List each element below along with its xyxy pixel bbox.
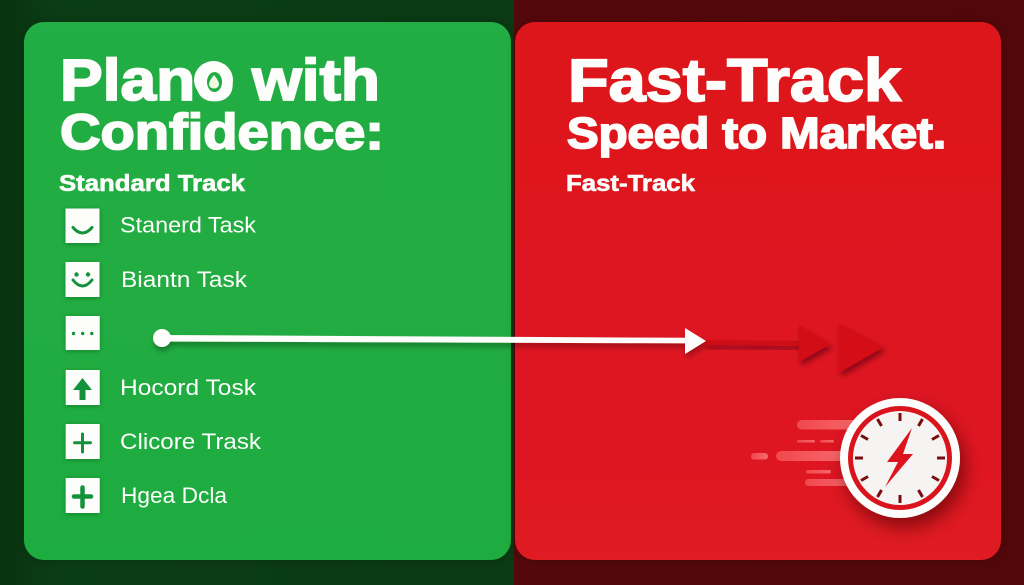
panel: standard track [24, 22, 511, 560]
panel: fast-track [515, 22, 1001, 560]
task row 4: Hocord Tosk [120, 375, 257, 400]
title: fast-track speed to market [567, 47, 946, 158]
task row 2: Biantn Task [121, 267, 248, 292]
subheading: fast-track: Fast-Track [566, 170, 695, 196]
task row 6: Hgea Dcla [121, 483, 228, 508]
background: dark red half [514, 0, 1024, 585]
task row 3: dots icon [66, 316, 100, 350]
task row 5 [66, 424, 262, 459]
task row 1: Stanerd Task [120, 212, 257, 238]
subheading: standard track: Standard Track [59, 170, 245, 196]
title: fast-track speed to market: Speed to Market. [567, 109, 946, 158]
red continuation arrow with double chevrons [704, 323, 884, 373]
task row 6 [66, 478, 228, 513]
task row 2 [66, 262, 248, 297]
title: plan with confidence: Plano with [60, 48, 380, 113]
task row 1 [66, 208, 257, 243]
stopwatch icon [840, 398, 960, 518]
task row 5: Clicore Trask [120, 429, 262, 454]
task row 4 [66, 370, 257, 405]
title: plan with confidence [60, 48, 384, 160]
arrow: standard to fast-track [153, 328, 706, 354]
title: plan with confidence: Confidence: [60, 104, 384, 160]
title: fast-track speed to market: Fast-Track [568, 47, 902, 114]
background: dark green half [0, 0, 514, 585]
speed lines [751, 420, 859, 486]
